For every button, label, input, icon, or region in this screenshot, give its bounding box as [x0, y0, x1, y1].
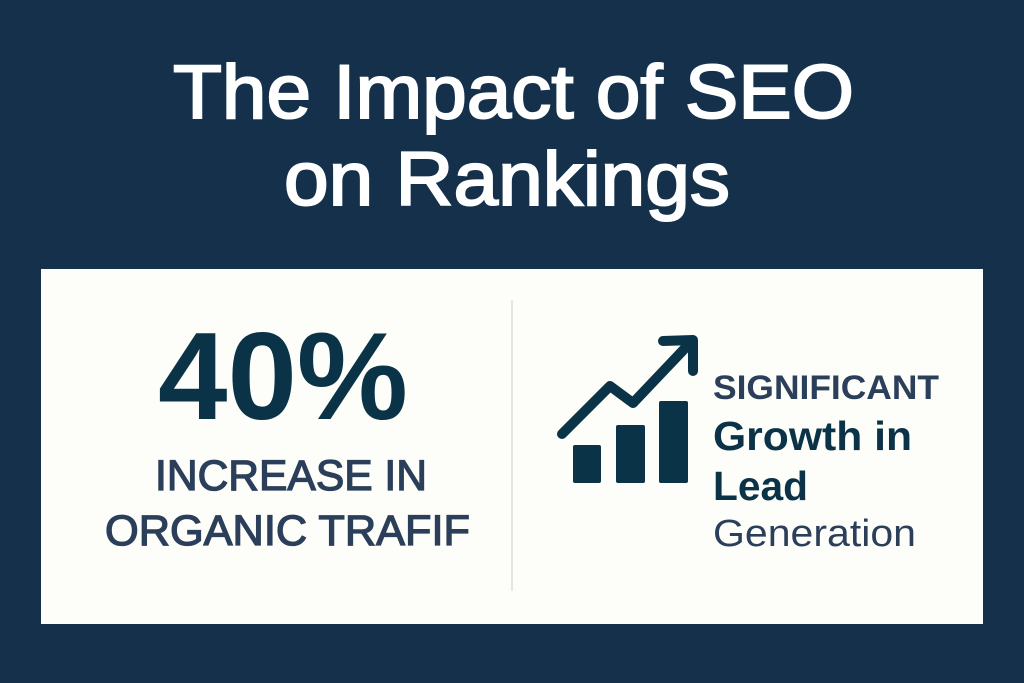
text block: significant growth in lead generation: Generation [713, 513, 916, 555]
text block: significant growth in lead generation: SIGNIFICANT [713, 369, 939, 407]
text block: increase in organic traffic [105, 452, 470, 555]
text block: increase in organic traffic: ORGANIC TRAFIF [105, 507, 470, 555]
title [173, 50, 854, 222]
icon: growth chart with arrow [562, 340, 693, 483]
text block: significant growth in lead generation: Lead [713, 463, 808, 509]
text block: significant growth in lead generation [713, 369, 939, 555]
big number: 40%: 40% [158, 308, 408, 446]
text block: significant growth in lead generation: Growth in [713, 413, 912, 459]
text block: increase in organic traffic: INCREASE IN [155, 452, 427, 500]
panel: statistics card [41, 269, 983, 624]
title: The Impact of SEO [173, 50, 854, 135]
title: on Rankings [284, 137, 730, 222]
